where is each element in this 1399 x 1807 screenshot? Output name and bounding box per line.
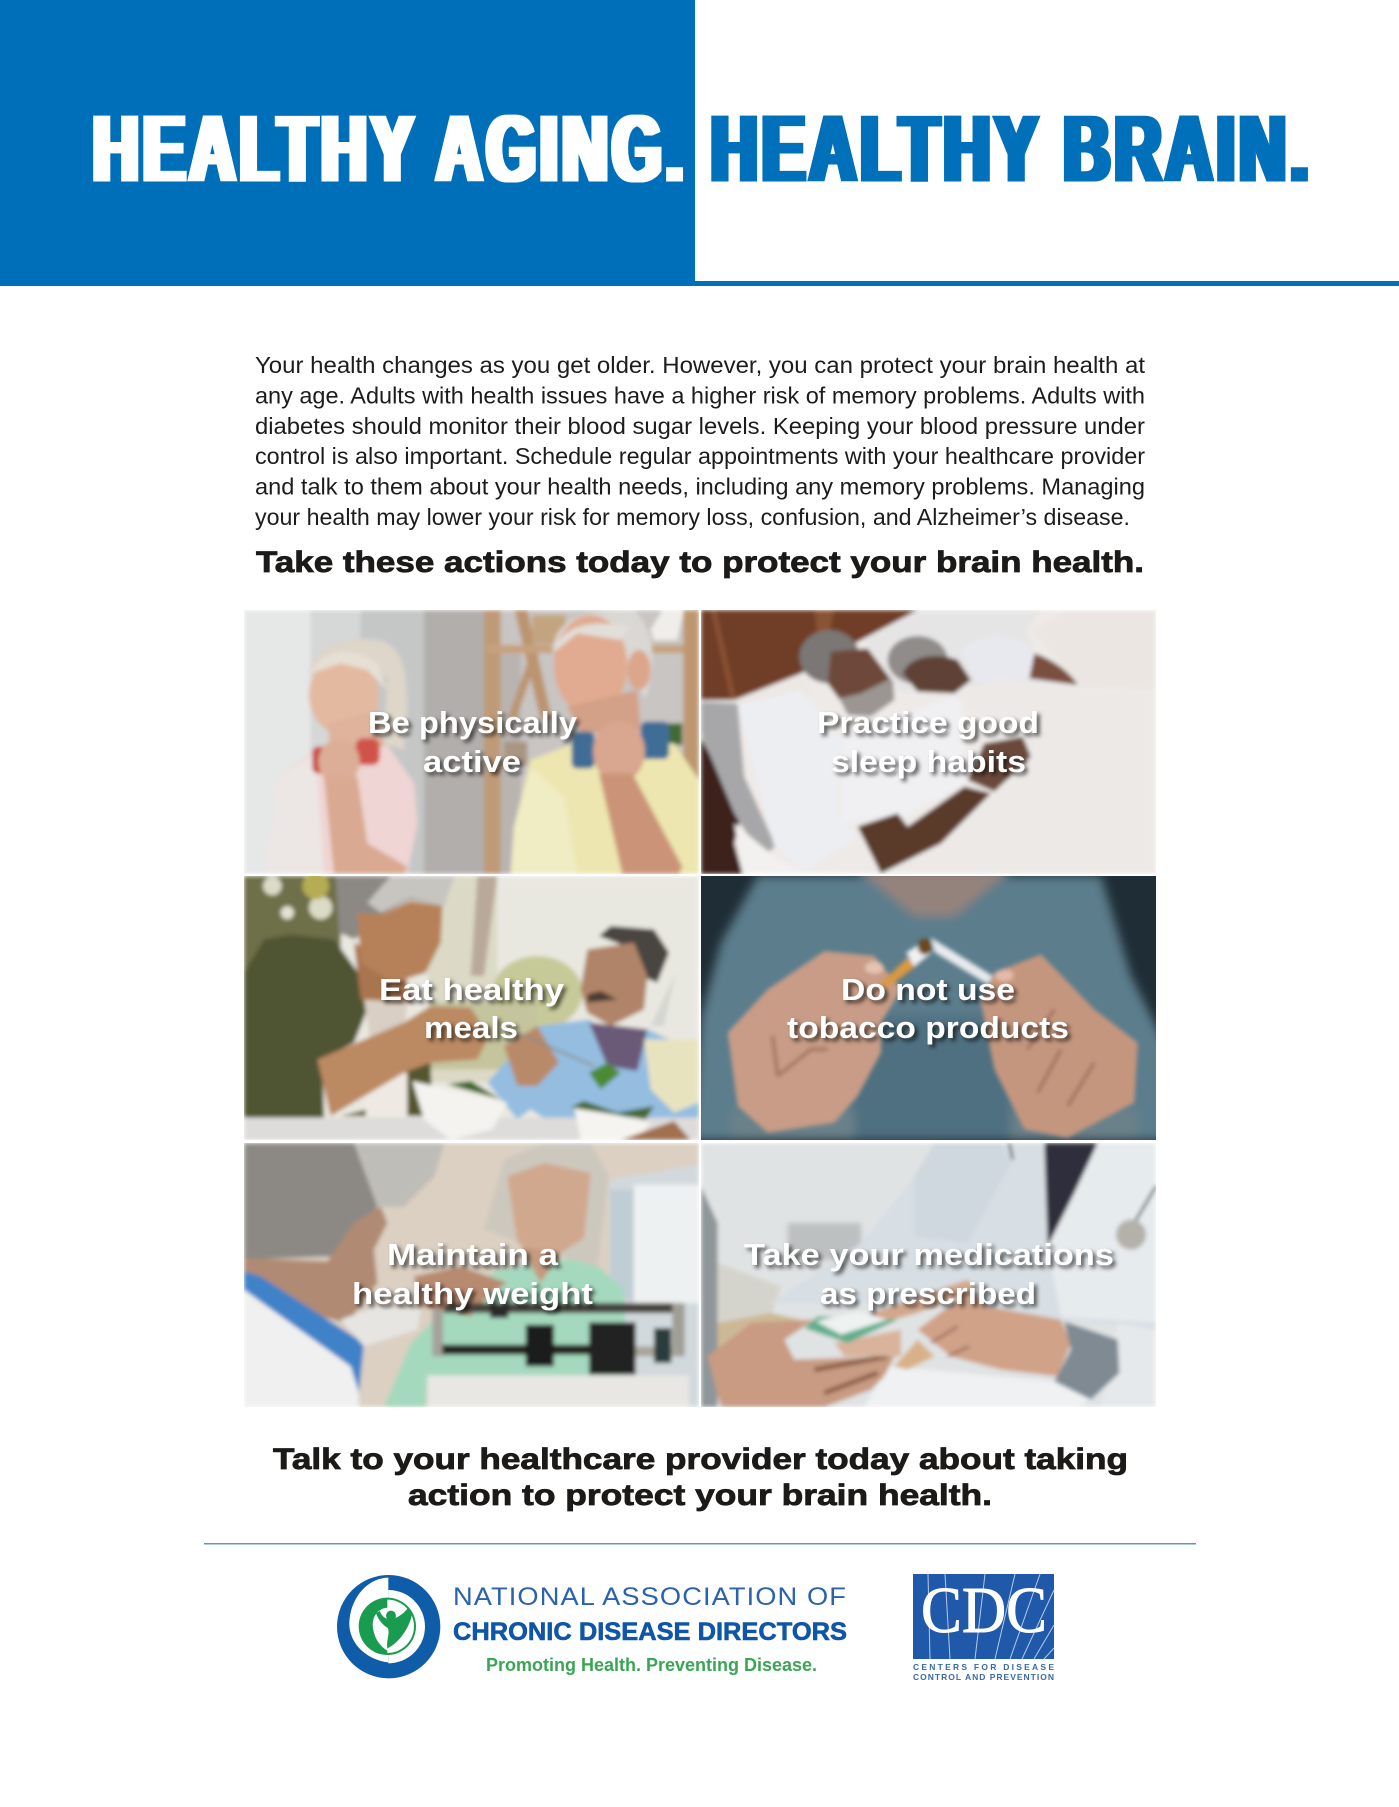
label <box>379 972 565 1045</box>
panel: take your medications as prescribed <box>701 1143 1156 1407</box>
closing message: Talk to your healthcare provider today about taking <box>273 1443 1128 1476</box>
label <box>744 1237 1114 1311</box>
panel: do not use tobacco products <box>701 876 1156 1140</box>
label: sleep habits <box>831 744 1026 779</box>
intro paragraph <box>255 352 1146 530</box>
intro paragraph: your health may lower your risk for memory loss, confusion, and Alzheimer’s disease. <box>255 504 1130 530</box>
label: Take your medications <box>744 1237 1114 1272</box>
photo: couple sleeping in bed <box>701 610 1156 874</box>
panel: maintain a healthy weight <box>244 1143 699 1407</box>
label <box>352 1237 593 1311</box>
label: Maintain a <box>387 1237 559 1272</box>
intro paragraph: diabetes should monitor their blood sugar levels. Keeping your blood pressure under <box>255 413 1145 439</box>
label: Do not use <box>841 972 1015 1007</box>
CDC caption: CONTROL AND PREVENTION <box>913 1672 1054 1682</box>
label: Practice good <box>817 705 1039 740</box>
panel: be physically active <box>244 610 699 874</box>
intro paragraph: and talk to them about your health needs, including any memory problems. Managing <box>255 474 1145 500</box>
label: tobacco products <box>787 1010 1069 1045</box>
photo: doctor weighing a patient <box>244 1143 699 1407</box>
label: healthy weight <box>352 1276 593 1311</box>
intro paragraph: control is also important. Schedule regular appointments with your healthcare provider <box>255 443 1145 469</box>
label: active <box>423 744 521 779</box>
header band <box>0 0 1399 286</box>
tagline: Promoting Health. Preventing Disease. <box>486 1655 817 1675</box>
panel: eat healthy meals <box>244 876 699 1140</box>
label <box>368 705 578 779</box>
intro paragraph: any age. Adults with health issues have a higher risk of memory problems. Adults with <box>255 382 1145 408</box>
photo: hands breaking a cigarette <box>701 876 1156 1140</box>
logo: national association of chronic disease directors: CHRONIC DISEASE DIRECTORS <box>453 1618 847 1646</box>
organization name: NATIONAL ASSOCIATION OF <box>453 1583 847 1611</box>
intro paragraph: Your health changes as you get older. However, you can protect your brain health at <box>255 352 1146 378</box>
panel: practice good sleep habits <box>701 610 1156 874</box>
title: HEALTHY AGING. <box>93 96 688 202</box>
CDC caption <box>913 1662 1054 1682</box>
logo: CDC <box>913 1574 1054 1682</box>
photo: doctor handing medication to patient <box>701 1143 1156 1407</box>
label <box>787 972 1069 1045</box>
label: meals <box>424 1010 518 1045</box>
closing message <box>272 1443 1128 1512</box>
CDC square: CDC <box>921 1574 1047 1647</box>
label <box>817 705 1039 779</box>
icon: NACDD emblem <box>337 1575 440 1678</box>
label: as prescribed <box>820 1276 1036 1311</box>
logo: national association of chronic disease directors <box>337 1575 847 1678</box>
label: Be physically <box>368 705 578 740</box>
label: Eat healthy <box>379 972 565 1007</box>
closing message: action to protect your brain health. <box>408 1479 992 1512</box>
call to action heading: Take these actions today to protect your brain health. <box>256 546 1144 579</box>
CDC caption: CENTERS FOR DISEASE <box>913 1662 1054 1672</box>
photo: two seniors lifting dumbbells <box>244 610 699 874</box>
photo: couple eating salad <box>244 873 699 1140</box>
